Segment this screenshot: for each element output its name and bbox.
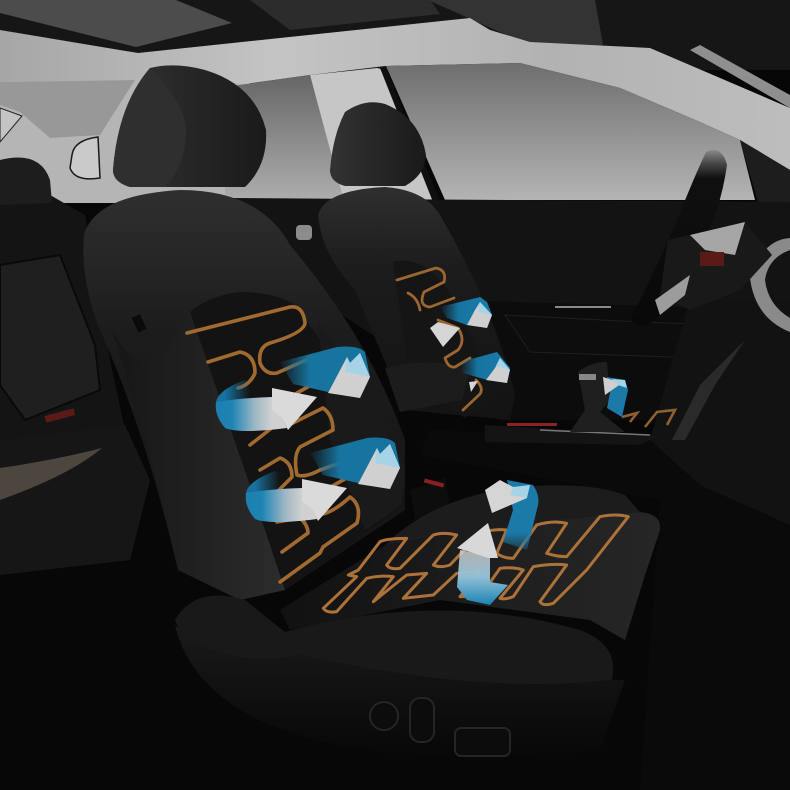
backrest: main seat [83,190,405,600]
steering wheel [630,150,772,326]
rear quarter window [70,137,100,179]
arrow arc back left [216,380,270,406]
seat cushion [280,512,660,640]
heating coil: main backrest [187,307,358,582]
heating coil: passenger seat [397,268,481,410]
seat belt buckle [410,478,450,520]
front cushion bolster [175,596,613,684]
heating coil: main cushion [323,515,628,612]
roof lining and A pillar [0,18,790,170]
door panels [230,198,790,420]
side bolster: main seat [112,310,285,600]
headrest: passenger seat [330,102,426,186]
front passenger seat [318,102,515,420]
airflow arrow and heating coil: driver seat [603,377,675,427]
sunroof and overhead console [0,0,790,108]
rear cabin trim [0,78,250,203]
backrest: passenger seat [318,187,515,420]
console red switches [507,423,557,426]
airflow arrows: passenger seat [430,297,510,392]
airflow arrows: main cushion [457,480,538,605]
B pillar [310,68,440,205]
airflow arrows: main backrest upper [216,347,370,431]
rear side window [225,75,345,200]
dashboard and centre console [420,238,790,790]
headrest: main seat [113,65,266,187]
seat controls [370,698,510,756]
front side window [386,63,755,200]
airflow arrows: main backrest lower [246,438,400,522]
gear shifter [570,362,625,432]
perforated centre panel: main seat [190,292,405,590]
rear seat [0,158,150,575]
arrow arc front left [216,397,287,431]
arrow arc right [280,347,370,398]
armrest: centre console [385,362,470,412]
arrowhead right [328,353,370,398]
arrowhead left [272,388,317,430]
main front seat [83,65,660,758]
thigh bolster: cushion [385,485,640,545]
seat base [175,625,625,758]
